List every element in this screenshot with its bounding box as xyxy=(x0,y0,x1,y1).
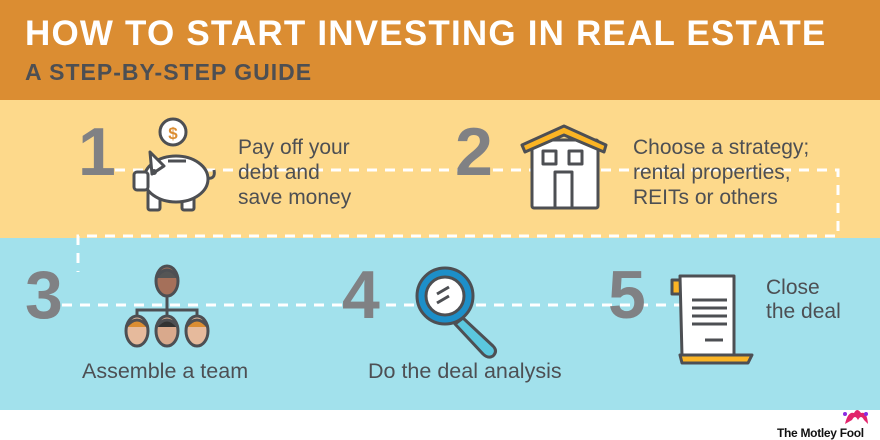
icon: contract scroll xyxy=(672,276,752,363)
text: step 4: Do the deal analysis xyxy=(368,359,562,383)
icon: piggy bank xyxy=(134,119,214,210)
step 5 xyxy=(608,257,841,363)
step 3 xyxy=(25,257,248,383)
text: step 5: Close xyxy=(766,276,820,299)
text: step 1: debt and xyxy=(238,161,320,184)
icon: magnifier xyxy=(417,268,496,357)
logo: The Motley Fool: The Motley Fool xyxy=(777,426,864,440)
subtitle: A STEP-BY-STEP GUIDE xyxy=(25,59,312,85)
step 4 xyxy=(342,257,562,383)
step 4: 4 xyxy=(342,257,380,333)
text: step 5: the deal xyxy=(766,300,841,323)
text: step 3: Assemble a team xyxy=(82,359,248,383)
icon: piggy bank: $ xyxy=(168,124,178,143)
title: HOW TO START INVESTING IN REAL ESTATE xyxy=(25,14,826,53)
icon: house xyxy=(522,126,606,208)
step 5: 5 xyxy=(608,257,646,333)
text: step 2: Choose a strategy; xyxy=(633,136,809,159)
step 2: 2 xyxy=(455,114,493,190)
text: step 2: REITs or others xyxy=(633,186,778,209)
step 2 xyxy=(455,114,809,209)
icon: team xyxy=(126,266,208,346)
step 1 xyxy=(78,114,352,210)
logo: The Motley Fool xyxy=(777,410,868,440)
text: step 1: Pay off your xyxy=(238,136,350,159)
step 3: 3 xyxy=(25,257,63,333)
step 1: 1 xyxy=(78,114,116,190)
dashed path xyxy=(62,170,838,305)
text: step 1: save money xyxy=(238,186,352,209)
text: step 2: rental properties, xyxy=(633,161,791,184)
